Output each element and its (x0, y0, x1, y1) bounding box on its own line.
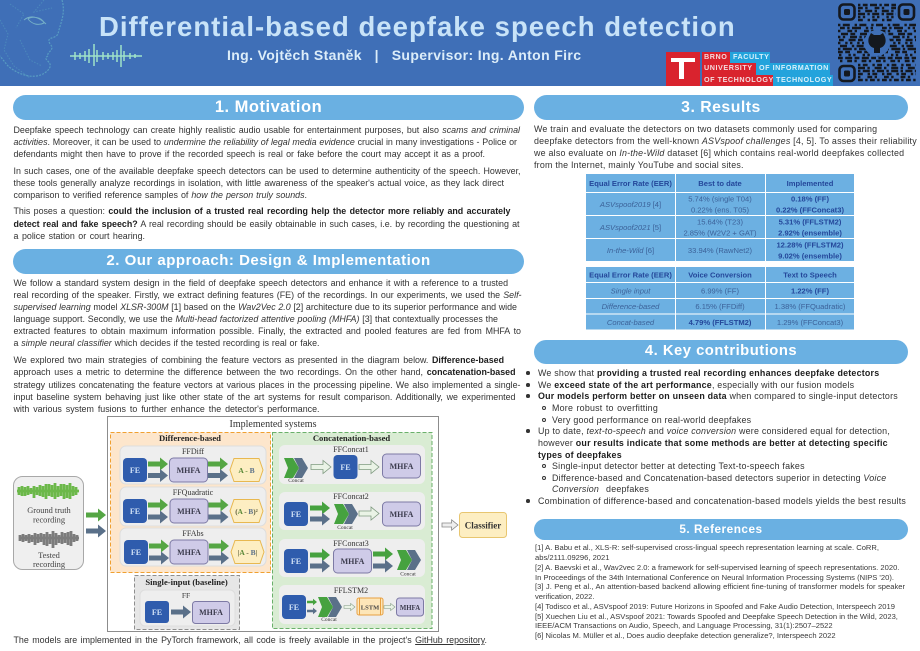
text block: approach: a simple neural classifier which decides if the tested recording is real or fake. (14, 338, 320, 348)
text block: results intro: deepfake detectors from the well-known ASVspoof challenges [4, 5]. To asses their reliability (534, 136, 917, 146)
panel: single-input baseline (134, 576, 240, 630)
text block: motivation: these tools generally analyze recordings in isolation, with little awareness of the speaker's actual voice, as they lack direct (14, 178, 504, 188)
results tables (586, 174, 854, 330)
text block: approach: extracted features to obtain maximum information possible. Finally, the extracted and pooled features are fed from MHFA to (14, 326, 521, 336)
label: tested: Tested (38, 551, 61, 560)
panel: single-input baseline: MHFA (199, 608, 223, 617)
table: voice conversion vs text to speech: Concat-based (607, 318, 655, 327)
panel: difference-based (110, 432, 270, 572)
table: best to date vs implemented: In-the-Wild [6] (607, 246, 654, 255)
heading: motivation: 1. Motivation (215, 98, 322, 116)
table: best to date vs implemented: 12.28% (FFLSTM2) (776, 240, 844, 250)
table: best to date vs implemented: Equal Error Rate (EER) (589, 179, 672, 188)
QR code (838, 3, 916, 82)
table: voice conversion vs text to speech: Voice Conversion (688, 270, 752, 280)
text block: references: [6] Nicolas M. Müller et al., Does audio deepfake detection generalize?, Interspeech 2022 (535, 631, 836, 640)
table: voice conversion vs text to speech: Text to Speech (783, 270, 837, 280)
text block: references: verification, 2022. (535, 592, 595, 601)
table: voice conversion vs text to speech: Single input (611, 286, 651, 296)
text block: motivation: activities. Moreover, it can be used to undermine the reliability of legal media evidence crucial in many investigations - Police or (14, 136, 517, 146)
text block: references: [2] A. Baevski et al., Wav2vec 2.0: a framework for self-supervised learning of speech representations. 2020. (535, 563, 899, 572)
table: voice conversion vs text to speech: 1.29% (FFConcat3) (777, 318, 844, 327)
text block: approach: We explored two main strategies of combining the feature vectors as presented in the diagram below. Difference-based (14, 355, 504, 365)
arrow: gray input (86, 524, 106, 538)
list: key contributions: More robust to overfitting (552, 403, 658, 413)
row: FFAbs: FFAbs (182, 529, 204, 538)
table: voice conversion vs text to speech: Difference-based (602, 302, 660, 311)
list: key contributions: Single-input detector better at detecting Text-to-speech fakes (552, 461, 805, 471)
row: FFLSTM2: MHFA (400, 605, 420, 612)
table: best to date vs implemented: 2.85% (W2V2 + GAT) (683, 228, 757, 238)
classifier box: Classifier (465, 520, 501, 530)
row: FFAbs: |A - B| (238, 548, 258, 557)
table: voice conversion vs text to speech: 1.22% (FF) (791, 286, 829, 296)
heading: our approach: 2. Our approach: Design & Implementation (106, 252, 431, 269)
list: key contributions: Conversion deepfakes (552, 484, 649, 494)
table: best to date vs implemented: 2.92% (ensemble) (778, 228, 842, 238)
text block: results intro: We train and evaluate the detectors on two datasets commonly used for comparing (534, 124, 877, 134)
logo: Brno University of Technology: TECHNOLOGY (776, 75, 832, 84)
text block: references: [5] Xuechen Liu et al., ASVspoof 2021: Towards Spoofed and Deepfake Speech Detection in the Wild, 2023, (535, 612, 898, 621)
logo: Brno University of Technology (666, 52, 833, 86)
table: best to date vs implemented: Best to date (698, 179, 742, 188)
text block: approach: supervised learning model XLSR-300M [1] based on the Wav2Vec 2.0 [2] architecture due to its superior performance and wide (14, 302, 517, 312)
table: best to date vs implemented: 0.22% (ens. T05) (691, 206, 750, 214)
heading: references (534, 519, 908, 540)
row: FFConcat1: Concat (288, 478, 304, 484)
caption: repository note: The models are implemented in the PyTorch framework, all code is freely available in the project's GitHub repository. (14, 635, 487, 645)
table: voice conversion vs text to speech: 6.99% (FF) (701, 286, 739, 296)
table: best to date vs implemented (589, 179, 844, 260)
row: FFDiff (120, 446, 266, 484)
title: Differential-based deepfake speech detection (99, 11, 736, 42)
heading: key contributions (534, 340, 908, 364)
row: FFConcat2: FFConcat2 (333, 492, 369, 501)
table: best to date vs implemented: 9.02% (ensemble) (778, 252, 842, 260)
waveform: tested (19, 531, 79, 548)
table: best to date vs implemented: 0.22% (FFConcat3) (776, 206, 844, 214)
outer frame with title: Implemented systems (230, 419, 317, 430)
table: voice conversion vs text to speech: 6.15% (FFDiff) (695, 302, 745, 311)
waveform: ground truth (17, 483, 79, 499)
list: key contributions: We show that providing a trusted real recording enhances deepfake detectors (538, 368, 879, 378)
row: FFLSTM2: FFLSTM2 (334, 586, 368, 595)
text block: motivation: Deepfake speech technology can create highly realistic audio usable for entertainment purposes, but also scams and criminal (14, 124, 520, 134)
text block: approach: real recording of the speaker. Firstly, we extract defining features (FE) of the recordings. In our experiments, we used the Self- (14, 290, 522, 300)
text block: results intro: from the Internet, mainly YouTube and social sites. (534, 160, 744, 170)
panel: single-input baseline: FE (152, 608, 162, 617)
list: key contributions: Combination of difference-based and concatenation-based models yields the best results (538, 496, 906, 506)
list: key contributions: however our results indicate that some methods are better at detecting specific (538, 438, 888, 448)
logo: Brno University of Technology: FACULTY (733, 52, 769, 61)
heading: our approach (13, 249, 524, 274)
heading: motivation (13, 95, 524, 120)
table: best to date vs implemented: ASVspoof2019 [4] (599, 200, 661, 209)
table: best to date vs implemented: ASVspoof2021 [5] (599, 223, 661, 232)
logo: Brno University of Technology: BRNO (704, 52, 727, 61)
panel: difference-based: Difference-based (159, 433, 221, 443)
logo: Brno University of Technology: OF TECHNOLOGY (704, 75, 774, 84)
text block: approach: language support. Secondly, we use the Multi-head factorized attentive pooling (MHFA) [3] that contextually processes the (14, 314, 498, 324)
table: best to date vs implemented: 33.94% (RawNet2) (688, 246, 753, 255)
table: best to date vs implemented: 5.31% (FFLSTM2) (779, 218, 842, 226)
table: voice conversion vs text to speech: 4.79% (FFLSTM2) (689, 318, 752, 327)
logo: Brno University of Technology: OF INFORMATION (759, 63, 829, 72)
row: FFConcat3: FFConcat3 (333, 539, 369, 548)
row: FFAbs (120, 528, 266, 566)
text block: approach: We follow a standard system design in the field of deepfake speech detectors and enhance it with a reference to a trusted (14, 278, 508, 288)
text block: motivation: a police station or court hearing. (14, 231, 145, 241)
outer frame with title (108, 416, 438, 632)
list: key contributions: We exceed state of the art performance, especially with our fusion models (538, 380, 854, 390)
row: FFConcat3: Concat (400, 572, 416, 578)
text block: motivation: detect real and fake speech? A real recording should be easily obtainable in such cases, i.e. by recording the questioning at (14, 219, 520, 229)
text block: approach: approach uses a metric to determine the difference between the two recordings. On the other hand, concatenation-based (14, 367, 516, 377)
row: FFLSTM2: LSTM (361, 604, 379, 612)
text block: motivation: defendants might then have to prove if the recorded speech is real or fake before the court may accept it as a proof. (14, 148, 485, 158)
row: FFConcat2 (279, 492, 425, 531)
table: best to date vs implemented: 5.74% (single T04) (688, 194, 752, 204)
text block: motivation: In such cases, one of the available deepfake speech detectors can be used to determine authenticity of the speech. However, (14, 166, 520, 176)
text block: references: [3] J. Peng et al., An attention-based backend allowing efficient fine-tuning of transformer models for speaker (535, 582, 905, 591)
table: best to date vs implemented: 0.18% (FF) (791, 194, 829, 204)
text block: references: In Proceedings of the 34th International Conference on Neural Information Processing Systems (NIPS '20). (535, 573, 894, 582)
panel: recordings input (14, 476, 84, 570)
row: FFConcat2: Concat (337, 525, 353, 531)
panel: single-input baseline: FF (182, 591, 190, 600)
row: FFConcat3 (279, 539, 425, 578)
panel: single-input baseline: Single-input (baseline) (145, 577, 228, 587)
row: FFQuadratic (120, 487, 266, 526)
heading: results: 3. Results (681, 99, 761, 116)
row: FFLSTM2 (279, 585, 425, 624)
authors: Ing. Vojtěch Staněk | Supervisor: Ing. Anton Firc (227, 47, 581, 63)
diagram: implemented systems (13, 416, 507, 632)
row: FFQuadratic: FFQuadratic (173, 488, 214, 497)
list: key contributions: Up to date, text-to-speech and voice conversion were considered equal for detection, (538, 426, 890, 436)
row: FFQuadratic: (A - B)² (235, 508, 258, 516)
text block: results intro: we also evaluate on In-the-Wild dataset [6] which contains real-world deepfakes collected (534, 148, 904, 158)
text block: approach: input baseline system behaving just like other state of the art systems for result comparison. Additionally, we experimented (14, 392, 516, 402)
list: key contributions: Difference-based and Concatenation-based detectors superior in detecting Voice (552, 473, 886, 483)
table: voice conversion vs text to speech: 1.38% (FFQuadratic) (775, 302, 846, 311)
arrow: green input (86, 508, 106, 522)
label: ground truth: Ground truth (27, 506, 72, 515)
text block: references: [1] A. Babu et al., XLS-R: self-supervised cross-lingual speech representation learning at scale. CoRR, (535, 543, 879, 552)
text block: references: abs/2111.09296, 2021 (535, 553, 609, 562)
list: key contributions: Very good performance on real-world deepfakes (552, 415, 751, 425)
row: FFDiff: A - B (238, 466, 255, 475)
row: FFConcat1 (279, 445, 425, 484)
arrow: to classifier (442, 520, 458, 530)
text block: motivation: This poses a question: could the inclusion of a trusted real recording help the detector more reliably and accurately (14, 206, 510, 216)
heading: references: 5. References (679, 522, 763, 536)
header banner (0, 0, 920, 86)
text block: references: IEEE/ACM Transactions on Audio, Speech, and Language Processing, 31(1):2507–2522 (535, 621, 833, 630)
text block: approach: with various system fusions to further enhance the detector's performance. (14, 404, 320, 414)
row: FFDiff: FFDiff (182, 447, 204, 456)
heading: key contributions: 4. Key contributions (645, 343, 797, 359)
logo: Brno University of Technology: UNIVERSITY (704, 63, 753, 72)
table: voice conversion vs text to speech (589, 270, 846, 327)
row: FFConcat1: FFConcat1 (333, 445, 369, 454)
text block: references: [4] Todisco et al., ASVspoof 2019: Future Horizons in Spoofed and Fake Audio Detection, Interspeech 2019 (535, 602, 895, 611)
list: key contributions: types of deepfakes (538, 450, 622, 460)
table: best to date vs implemented: Implemented (787, 179, 834, 188)
table: voice conversion vs text to speech: Equal Error Rate (EER) (589, 270, 672, 280)
panel: concatenation-based (272, 432, 432, 628)
text block: motivation: comparison to verified reference samples of how the person truly sounds. (14, 190, 307, 200)
icon: wireframe face and sound wave (0, 0, 142, 78)
list: key contributions: Our models perform better on unseen data when compared to single-input detectors (538, 391, 898, 401)
panel: concatenation-based: Concatenation-based (313, 433, 390, 443)
text block: approach: strategy utilizes concatenating the feature vectors at various places in the processing pipeline. We also implemented a single- (14, 380, 520, 390)
heading: results (534, 95, 908, 120)
label: recording: recording (33, 516, 66, 524)
label: recording: recording (33, 560, 66, 569)
row: FFLSTM2: Concat (321, 617, 337, 623)
classifier box (460, 512, 506, 538)
table: best to date vs implemented: 15.64% (T23) (697, 218, 743, 226)
